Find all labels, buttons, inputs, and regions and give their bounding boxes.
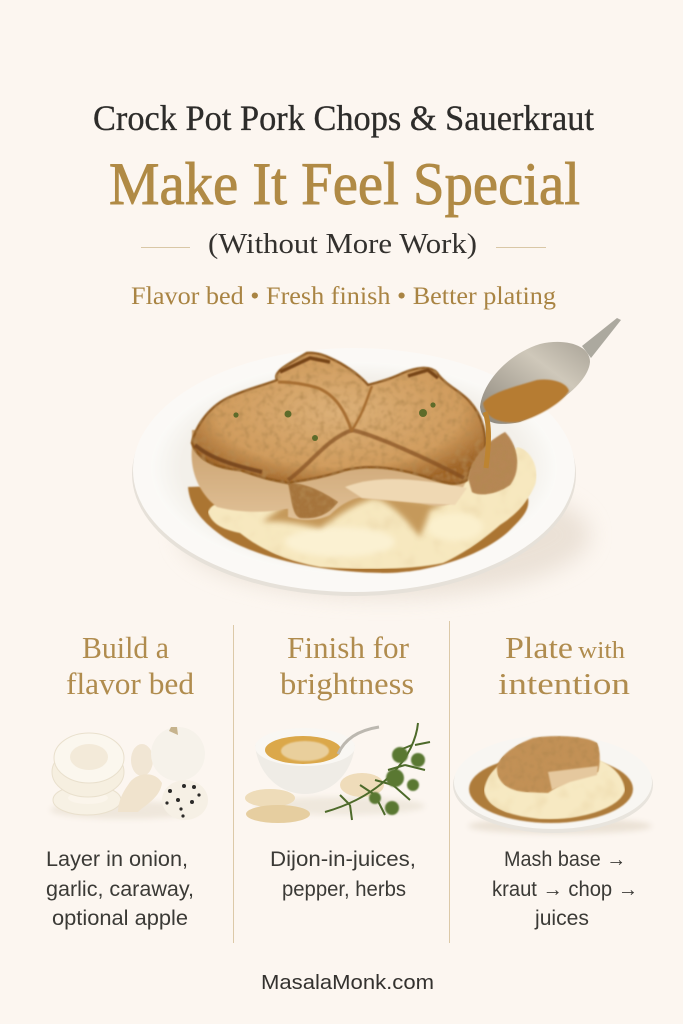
text: Dijon-in-juices, — [270, 848, 416, 871]
sauce pool — [188, 480, 528, 573]
heading: with — [578, 638, 625, 664]
icon: onion, garlic, peppercorns — [50, 727, 208, 820]
footer: MasalaMonk.com — [261, 972, 434, 994]
text — [270, 848, 416, 901]
heading — [66, 630, 195, 701]
column 2: finish for brightness — [245, 630, 430, 901]
heading: brightness — [280, 666, 414, 701]
chop crust — [192, 353, 485, 484]
main heading: Make It Feel Special — [109, 151, 580, 217]
text: kraut → chop → — [492, 878, 638, 901]
text: juices — [534, 907, 589, 930]
mashed potatoes — [208, 447, 536, 569]
text: Layer in onion, — [46, 848, 188, 871]
text — [492, 848, 638, 930]
heading: intention — [498, 666, 631, 701]
subheading with rules: (Without More Work) — [208, 229, 477, 260]
text: garlic, caraway, — [46, 878, 194, 901]
chop sides — [192, 430, 473, 520]
text — [46, 848, 194, 930]
text: pepper, herbs — [282, 878, 406, 901]
heading — [280, 630, 414, 701]
icon: sauce bowl, apple slices, herbs — [245, 723, 430, 823]
hero image: pork chops on plate with spoon — [132, 318, 621, 597]
spoon — [480, 318, 621, 468]
column 3: plate with intention — [453, 630, 653, 930]
text: optional apple — [52, 907, 188, 930]
onions under chop — [468, 432, 517, 494]
title: Crock Pot Pork Chops & Sauerkraut — [93, 98, 594, 138]
heading: Finish for — [287, 630, 410, 665]
plate — [132, 348, 590, 597]
heading: Plate — [505, 630, 573, 665]
column 1: build a flavor bed — [46, 630, 208, 930]
pork chops — [192, 353, 485, 520]
herb flecks — [233, 402, 436, 441]
tagline: Flavor bed • Fresh finish • Better plating — [131, 283, 557, 310]
heading: Build a — [82, 630, 169, 665]
dividers — [233, 621, 450, 943]
heading — [498, 630, 631, 701]
heading: flavor bed — [66, 666, 195, 701]
text: Mash base → — [504, 848, 626, 871]
icon: small plated chop — [453, 735, 653, 834]
